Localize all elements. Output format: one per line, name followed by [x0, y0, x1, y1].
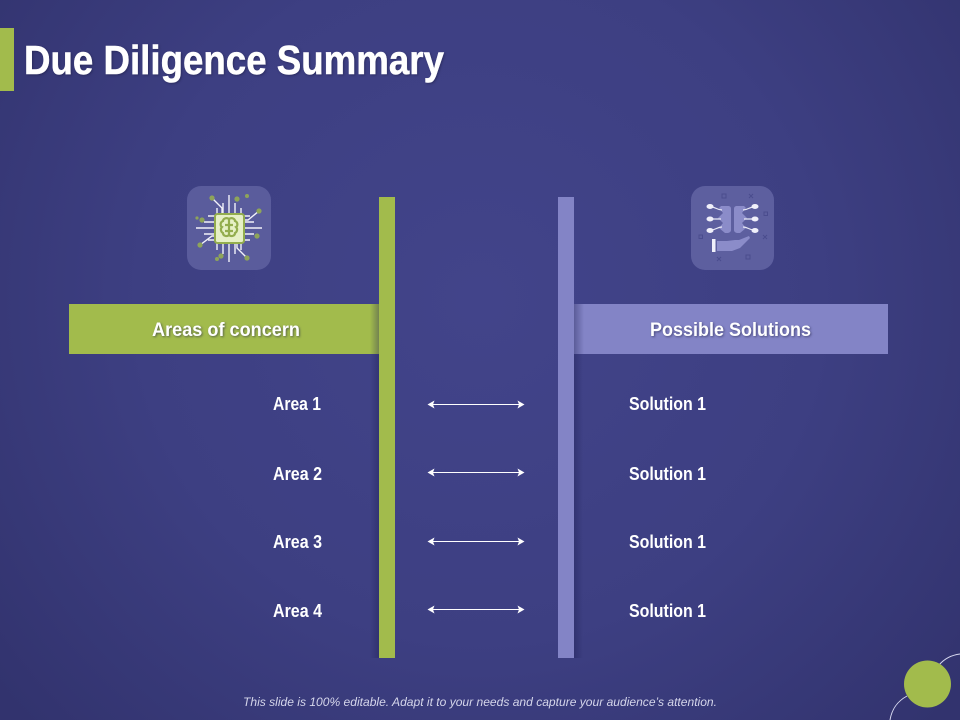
icon: circuit nodes — [195, 194, 262, 261]
right column bar shadow — [574, 354, 583, 658]
solution labels: Solution 1 — [629, 532, 706, 552]
arrow: row 1 — [428, 400, 524, 408]
solution labels — [629, 394, 706, 621]
solution labels: Solution 1 — [629, 394, 706, 414]
icon: connector lines — [711, 207, 754, 230]
icon: chip circuit traces — [196, 195, 262, 262]
arrow: row 3 — [428, 538, 524, 546]
right vertical bar — [558, 197, 574, 658]
area labels — [273, 394, 322, 621]
title: Due Diligence Summary — [24, 37, 444, 83]
icon: connector nodes — [706, 204, 758, 233]
arrows — [428, 400, 524, 614]
area labels: Area 3 — [273, 532, 322, 552]
icon: brain — [221, 218, 237, 236]
panel: areas of concern icon — [187, 186, 271, 270]
panel: possible solutions icon — [691, 186, 774, 270]
left banner: areas of concern — [69, 304, 380, 354]
right banner: possible solutions: Possible Solutions — [650, 320, 811, 341]
area labels: Area 2 — [273, 464, 322, 484]
arrow: row 4 — [428, 606, 524, 614]
solution labels: Solution 1 — [629, 464, 706, 484]
icon: scattered marks — [699, 194, 768, 261]
icon: right brain half — [734, 206, 747, 233]
icon: left brain half — [718, 206, 731, 233]
icon: chip body — [215, 214, 244, 243]
decorative corner circle — [890, 654, 960, 720]
left column bar shadow — [370, 354, 379, 658]
arrow: row 2 — [428, 468, 524, 476]
title accent bar — [0, 28, 14, 91]
icon: hand — [712, 236, 750, 252]
footer note: This slide is 100% editable. Adapt it to your needs and capture your audience’s attention. — [243, 695, 717, 709]
area labels: Area 4 — [273, 601, 322, 621]
area labels: Area 1 — [273, 394, 321, 414]
solution labels: Solution 1 — [629, 601, 706, 621]
right banner: possible solutions — [574, 304, 888, 354]
left banner: areas of concern: Areas of concern — [152, 320, 300, 341]
left vertical bar — [379, 197, 395, 658]
